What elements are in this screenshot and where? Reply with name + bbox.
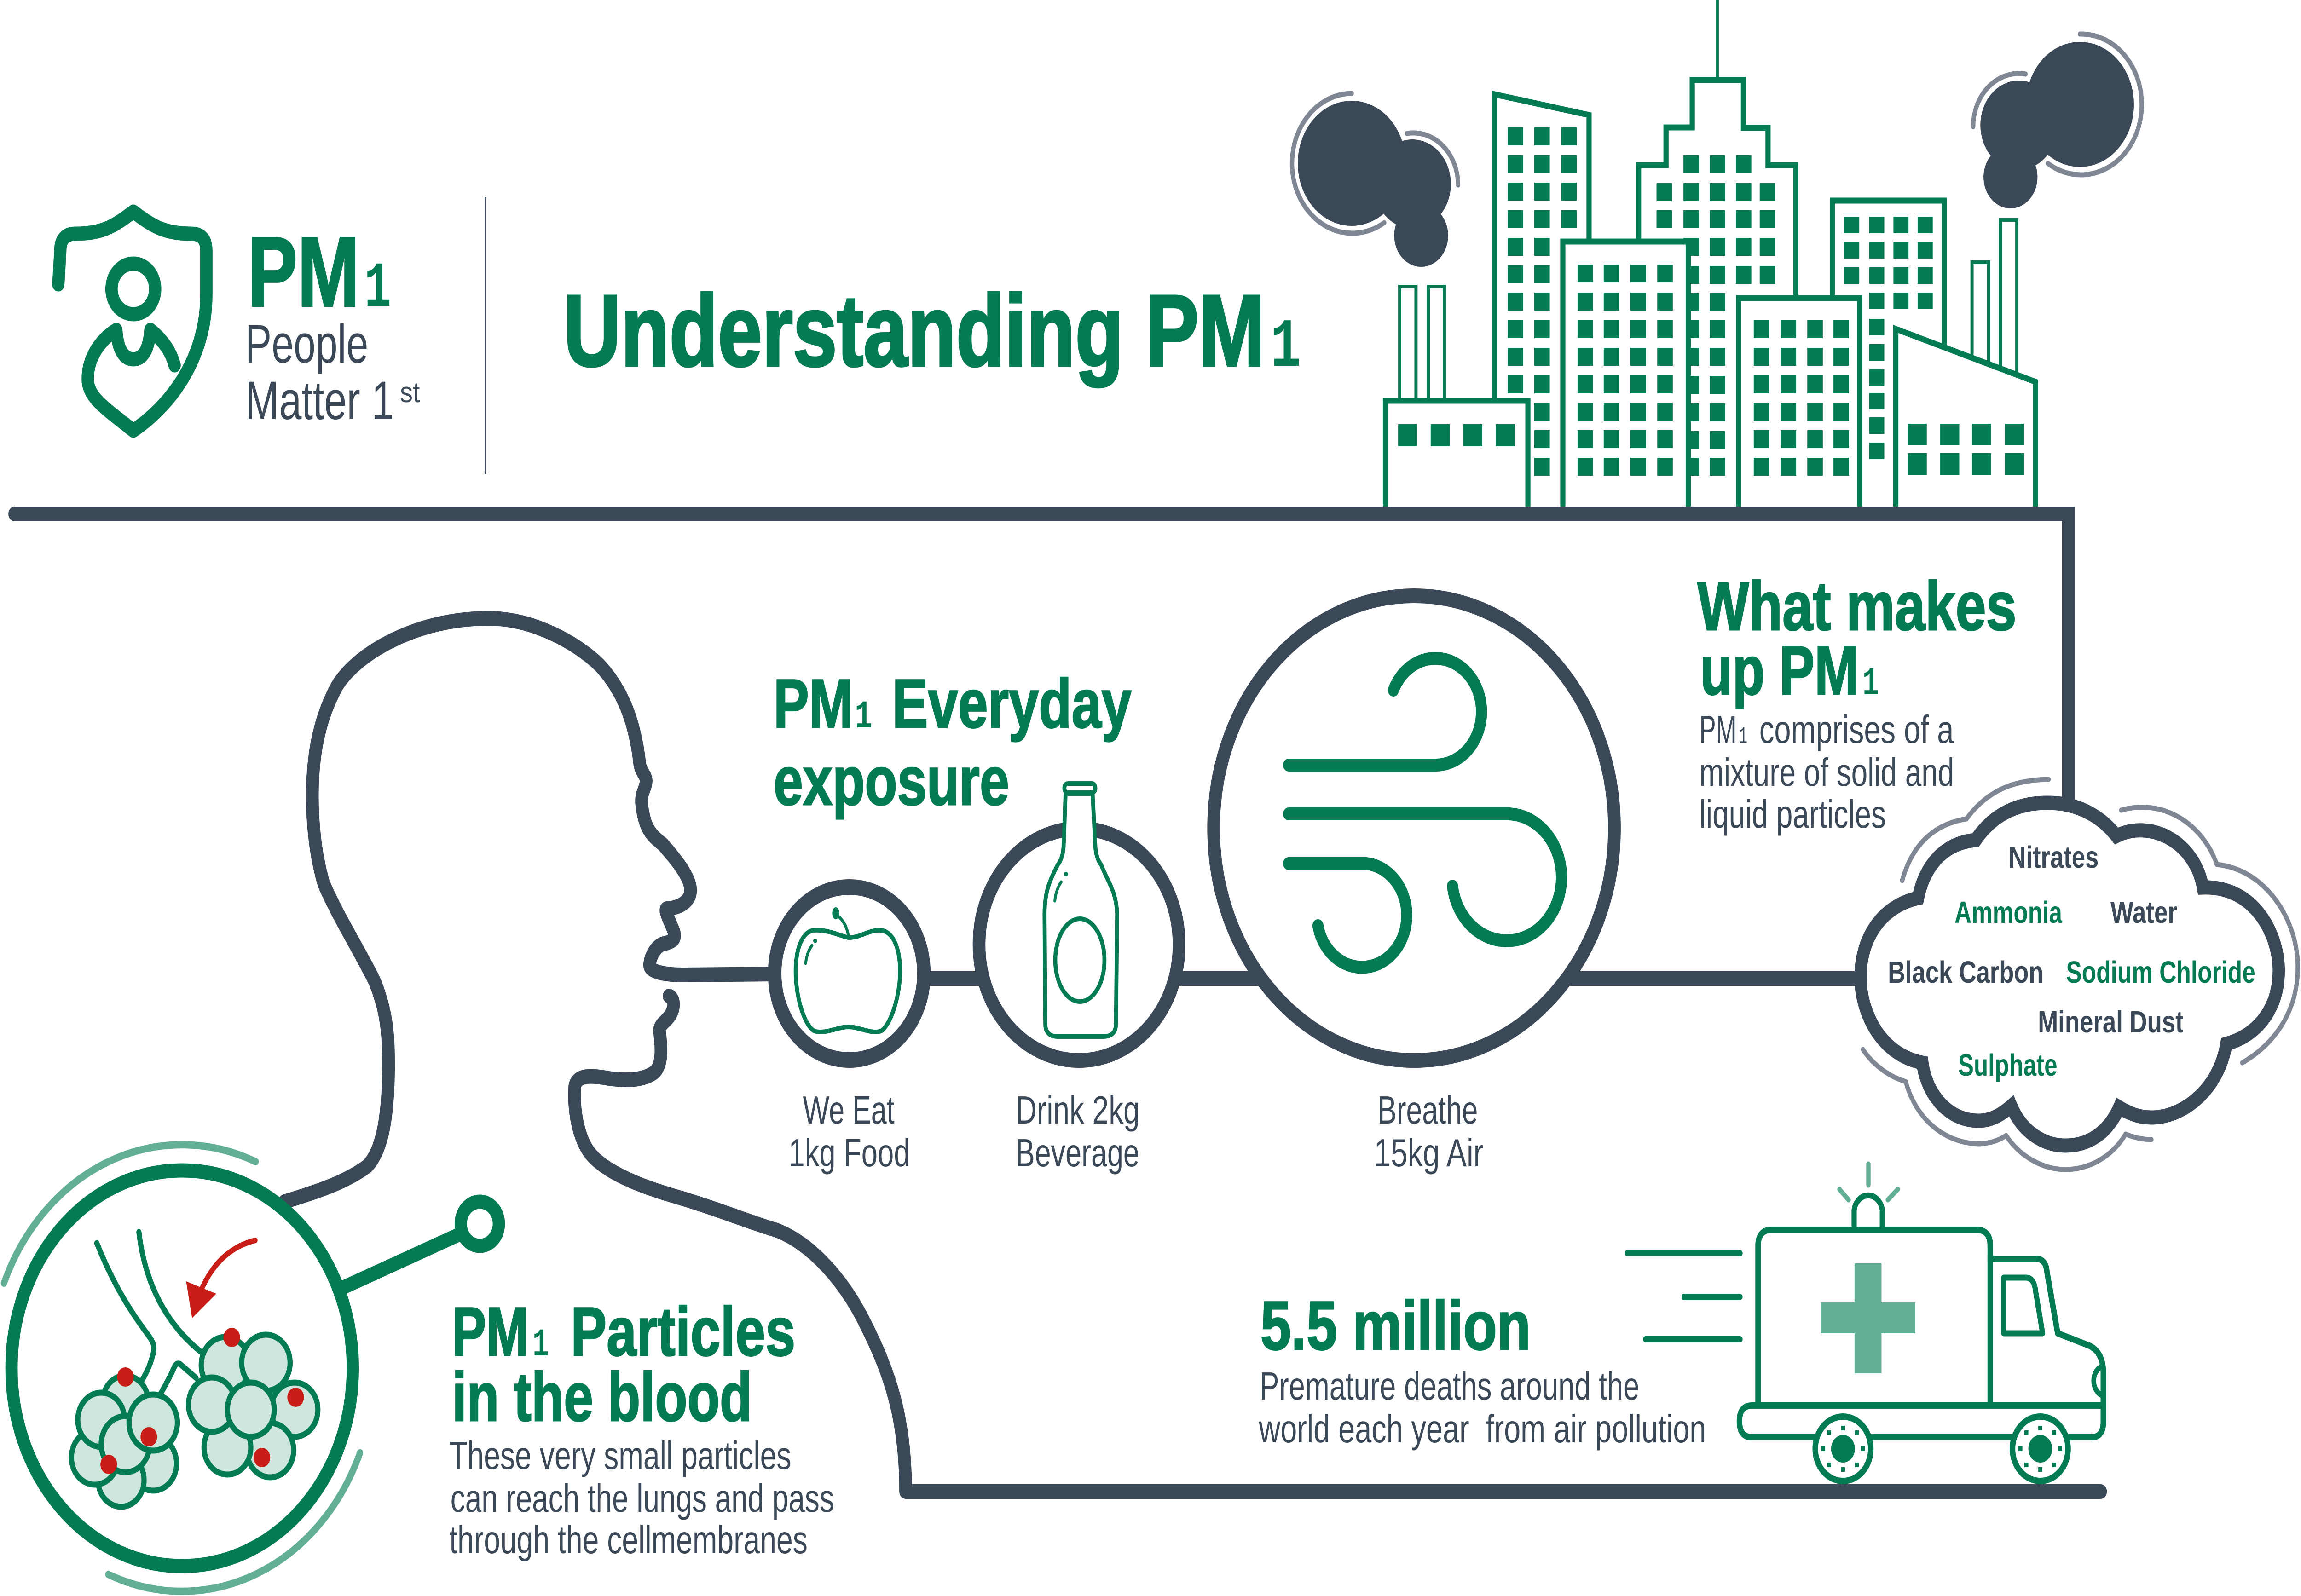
title: Understanding PM (564, 274, 1265, 387)
icon: bottle (1045, 784, 1117, 1037)
logo (58, 212, 420, 431)
right factory (1896, 329, 2035, 511)
body text (449, 1434, 834, 1561)
cab window (2004, 1278, 2043, 1333)
icon: apple (796, 907, 900, 1032)
ambulance body (1740, 1230, 2104, 1437)
siren (1839, 1164, 1898, 1230)
label: drink: Drink 2kg (1016, 1088, 1140, 1132)
label: we eat (789, 1088, 910, 1175)
label: we eat: 1kg Food (789, 1131, 910, 1175)
label: drink (1016, 1088, 1140, 1175)
tall left building (1495, 94, 1589, 511)
connector: lung circle to ring (341, 1202, 499, 1288)
heading: PM1 Everyday exposure (774, 665, 1132, 819)
speed lines (1628, 1253, 1740, 1339)
connector line: mouth through exposure circles to cloud (929, 971, 1865, 986)
statistic: 5.5 million (1260, 1287, 1531, 1364)
label: we eat: We Eat (803, 1088, 895, 1132)
logo wordmark: st (400, 377, 420, 409)
text block: particles in the blood (449, 1293, 834, 1561)
title: 1 (1270, 309, 1301, 387)
heading: PM1 Everyday exposure: PM (774, 665, 853, 742)
chimneys right (1972, 220, 2017, 400)
antenna (1716, 0, 1719, 79)
alveoli right cluster (189, 1335, 318, 1477)
logo wordmark (245, 216, 420, 431)
heading: PM1 Everyday exposure: exposure (774, 742, 1009, 819)
body text: through the cellmembranes (449, 1518, 808, 1561)
body text (1700, 708, 1954, 836)
right back building (1833, 201, 1944, 511)
medical cross (1821, 1263, 1915, 1373)
smoke cloud left (1292, 93, 1458, 267)
body text: can reach the lungs and pass (451, 1476, 834, 1520)
heading: what makes up PM1: What makes (1697, 567, 2017, 645)
alveoli left cluster (71, 1376, 177, 1507)
body text: PM (1700, 708, 1737, 751)
bronchi (97, 1232, 202, 1394)
icon: wind (1289, 658, 1561, 967)
label: breathe: 15kg Air (1374, 1131, 1484, 1175)
front building left (1563, 242, 1688, 511)
apple circle (775, 887, 924, 1060)
body text: These very small particles (449, 1434, 792, 1477)
head silhouette (284, 618, 2101, 1492)
body text: liquid particles (1700, 792, 1886, 836)
cloud labels: Mineral Dust (2038, 1005, 2184, 1039)
logo wordmark: People (245, 314, 368, 375)
stepped tower (1639, 80, 1796, 511)
gray accent arcs (1863, 779, 2298, 1170)
bottle circle (979, 784, 1179, 1060)
breath circle (1214, 596, 1614, 1060)
label: breathe (1374, 1088, 1484, 1175)
light green accent arcs (4, 1145, 360, 1591)
heading: PM1 particles in the blood: in the blood (452, 1358, 752, 1435)
cloud labels: Sulphate (1958, 1048, 2058, 1083)
front wheel (2012, 1417, 2068, 1481)
smoke cloud right (1973, 34, 2142, 208)
city skyline illustration (1292, 0, 2142, 511)
body text: mixture of solid and (1700, 750, 1954, 794)
label: breathe: Breathe (1377, 1088, 1478, 1132)
heading: PM1 particles in the blood: Particles (571, 1293, 795, 1370)
cloud labels: Black Carbon (1888, 955, 2043, 990)
text block: what makes up PM1 (1697, 567, 2017, 836)
cloud labels (1888, 840, 2255, 1083)
headlight (2094, 1366, 2102, 1395)
heading: PM1 Everyday exposure: Everyday (892, 665, 1132, 742)
body text: Premature deaths around the (1260, 1364, 1639, 1408)
logo wordmark: 1 (364, 253, 391, 326)
heading: what makes up PM1: 1 (1862, 662, 1879, 706)
cloud labels: Nitrates (2008, 840, 2099, 875)
logo wordmark: PM (248, 216, 359, 327)
red arrow (186, 1240, 255, 1318)
body text: world each year from air pollution (1259, 1407, 1706, 1451)
connector line: top bar down to cloud (15, 514, 2069, 805)
left factory chimneys (1400, 287, 1445, 402)
heading: PM1 particles in the blood (452, 1293, 795, 1435)
body text: 1 (1739, 723, 1747, 750)
heading: PM1 Everyday exposure: 1 (855, 695, 872, 739)
cloud outline (1861, 803, 2279, 1146)
label: drink: Beverage (1016, 1131, 1139, 1175)
rear wheel (1815, 1417, 1871, 1481)
icon: ambulance (1628, 1164, 2104, 1481)
body text: comprises of a (1759, 708, 1954, 751)
text block: 5.5 million (1259, 1287, 1706, 1451)
left factory (1386, 401, 1528, 511)
body text (1259, 1364, 1706, 1451)
front building right (1739, 298, 1860, 511)
icon: shield with person (58, 212, 206, 431)
logo wordmark: Matter 1 (245, 370, 394, 431)
lung circle (4, 1145, 360, 1591)
heading: PM1 particles in the blood: 1 (532, 1323, 549, 1367)
heading: what makes up PM1: up PM (1700, 632, 1858, 709)
cloud labels: Water (2110, 895, 2177, 930)
heading: what makes up PM1 (1697, 567, 2017, 709)
heading: PM1 particles in the blood: PM (452, 1293, 529, 1370)
cloud labels: Ammonia (1954, 895, 2063, 930)
cloud labels: Sodium Chloride (2066, 955, 2255, 990)
cloud of PM1 components (1861, 779, 2298, 1170)
red particles (100, 1328, 304, 1474)
